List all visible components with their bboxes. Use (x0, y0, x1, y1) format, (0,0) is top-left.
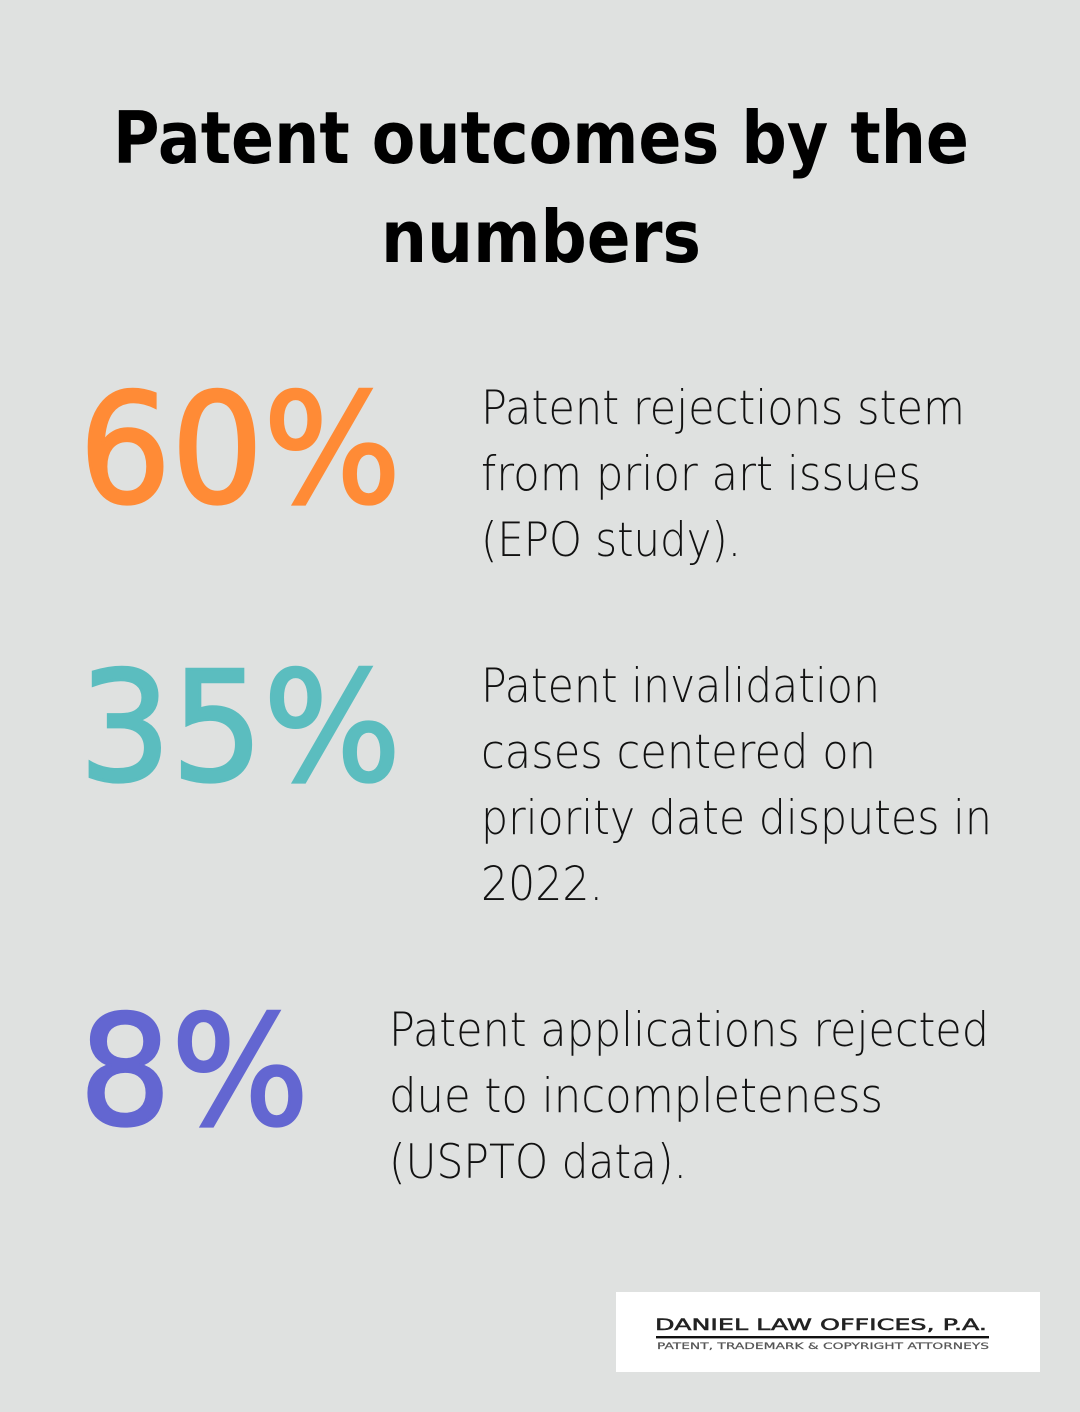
description: priority date: priority date disputes in (481, 791, 992, 846)
number: 35%: 35% (79, 639, 401, 816)
title: numbers (381, 195, 701, 279)
description: prior art: Patent rejections stem (481, 381, 965, 436)
stat: 35% priority date (79, 639, 992, 912)
description: priority date: 2022. (481, 857, 603, 912)
description: priority date (481, 659, 992, 912)
stat: 60% prior art (79, 361, 965, 568)
logo: Daniel Law Offices: DANIEL LAW OFFICES, P.A. (655, 1315, 987, 1334)
number: 8%: 8% (79, 983, 309, 1160)
description: incompleteness: (USPTO data). (389, 1135, 687, 1190)
description: incompleteness: Patent applications rejected (389, 1003, 989, 1058)
description: prior art (481, 381, 965, 568)
description: priority date: Patent invalidation (481, 659, 880, 714)
description: priority date: cases centered on (481, 725, 876, 780)
description: prior art: from prior art issues (481, 447, 921, 502)
logo: Daniel Law Offices: PATENT, TRADEMARK & COPYRIGHT ATTORNEYS (657, 1342, 989, 1352)
description: prior art: (EPO study). (481, 513, 741, 568)
description: incompleteness: due to incompleteness (389, 1069, 883, 1124)
logo: Daniel Law Offices (616, 1292, 1040, 1372)
description: incompleteness (389, 1003, 989, 1190)
stat: 8% incompleteness (79, 983, 989, 1190)
number: 60%: 60% (79, 361, 401, 538)
title (113, 96, 969, 279)
title: Patent outcomes by the (113, 96, 969, 180)
